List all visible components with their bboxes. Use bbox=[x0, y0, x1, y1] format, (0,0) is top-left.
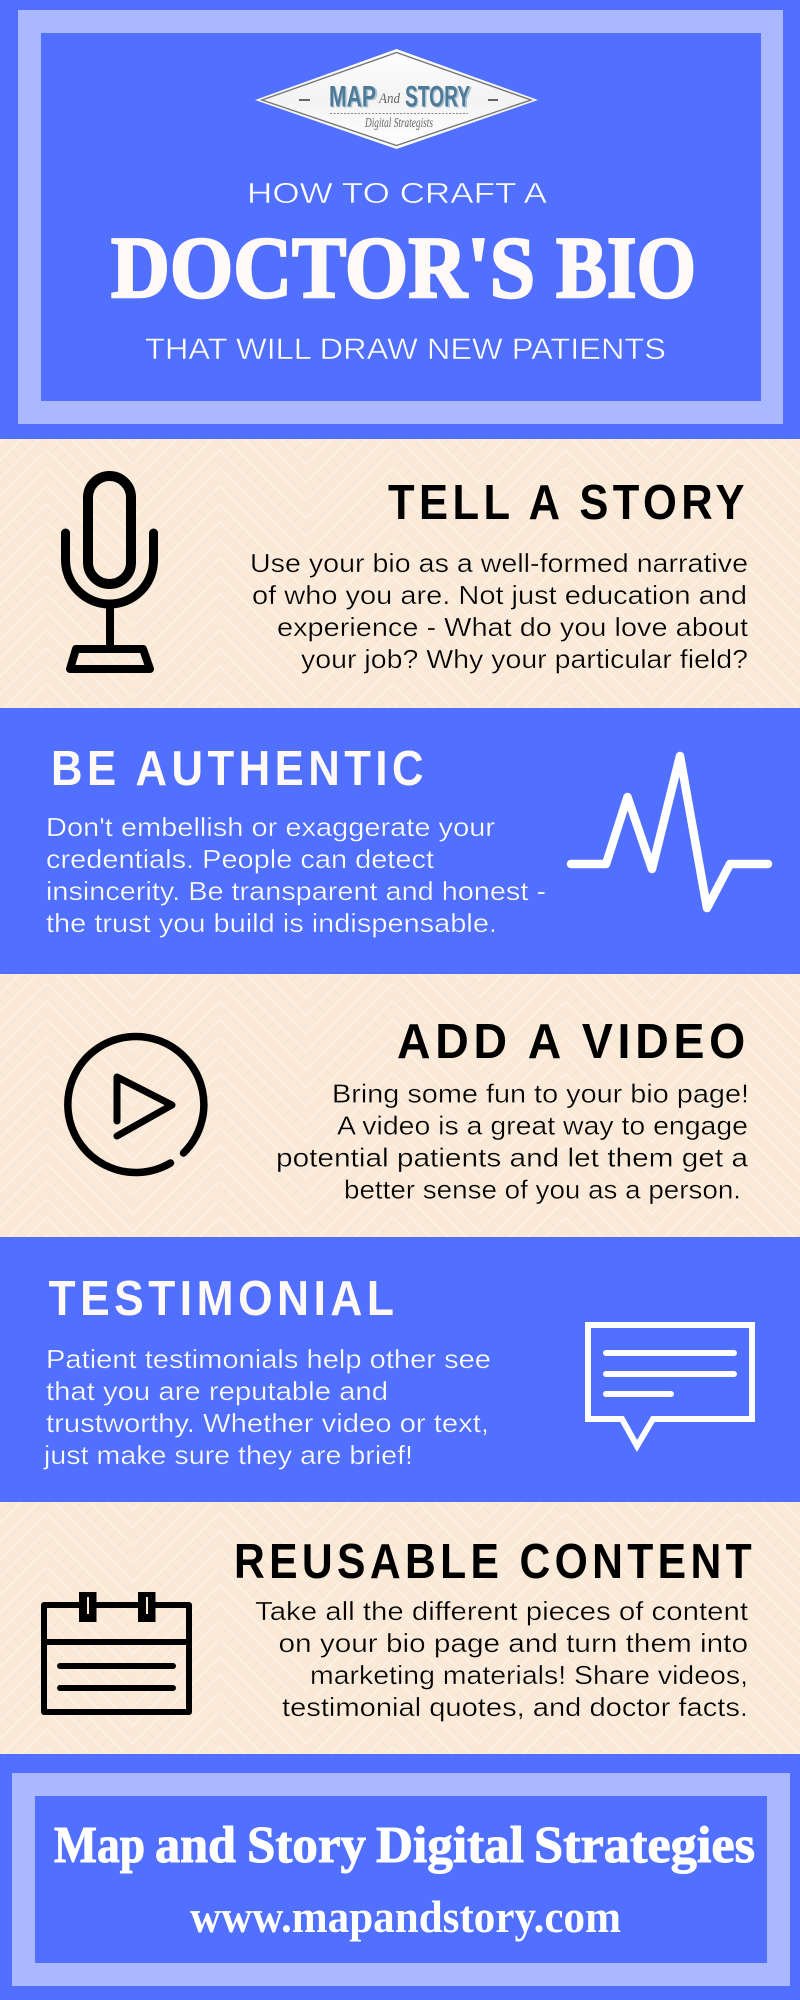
body text: be authentic: the trust you build is indispensable. bbox=[46, 908, 497, 938]
body text: add a video: A video is a great way to engage bbox=[337, 1110, 748, 1140]
footer company name: and bbox=[155, 1817, 236, 1874]
body text: reusable content: on your bio page and turn them into bbox=[278, 1628, 748, 1658]
body text: be authentic: credentials. People can detect bbox=[46, 844, 435, 874]
header frame bbox=[18, 10, 783, 424]
logo: Map and Story diamond badge: Digital Strategists bbox=[364, 116, 433, 131]
body text: add a video: potential patients and let them get a bbox=[276, 1142, 749, 1172]
body text: reusable content: Take all the different pieces of content bbox=[255, 1596, 749, 1626]
body text: add a video: better sense of you as a person. bbox=[344, 1174, 741, 1204]
body text: add a video: Bring some fun to your bio page! bbox=[332, 1078, 749, 1108]
body text: reusable content: testimonial quotes, and doctor facts. bbox=[282, 1692, 748, 1722]
body text: reusable content: marketing materials! Share videos, bbox=[310, 1660, 748, 1690]
body text: testimonial: trustworthy. Whether video or text, bbox=[46, 1408, 489, 1438]
footer company name: Digital bbox=[376, 1817, 524, 1874]
icon: heartbeat line bbox=[571, 756, 768, 908]
icon: play button bbox=[68, 1036, 204, 1172]
icon: calendar bbox=[44, 1592, 189, 1712]
logo: Map and Story diamond badge: And bbox=[378, 91, 400, 107]
icon: speech bubble bbox=[588, 1325, 752, 1446]
body text: tell a story: Use your bio as a well-formed narrative bbox=[250, 548, 748, 578]
logo: Map and Story diamond badge: MAP bbox=[329, 80, 376, 114]
heading: add a video: ADD A VIDEO bbox=[397, 1015, 750, 1069]
footer company name: Map bbox=[54, 1817, 145, 1874]
main title: DOCTOR'S bbox=[111, 220, 535, 317]
body text: tell a story: your job? Why your particular field? bbox=[301, 644, 748, 674]
body text: be authentic: insincerity. Be transparent and honest - bbox=[46, 876, 546, 906]
body text: testimonial bbox=[43, 1344, 491, 1470]
footer company name: Strategies bbox=[534, 1817, 755, 1874]
panel: reusable content bbox=[0, 1502, 800, 1754]
kicker: how to craft a: HOW TO CRAFT A bbox=[247, 178, 548, 210]
footer panel bbox=[12, 1773, 790, 1986]
footer frame bbox=[12, 1773, 790, 1986]
subtitle: THAT WILL DRAW NEW PATIENTS bbox=[145, 333, 666, 366]
body text: tell a story bbox=[250, 548, 749, 674]
panel: testimonial bbox=[43, 1272, 752, 1470]
body text: tell a story: of who you are. Not just education and bbox=[252, 580, 747, 610]
panel: add a video bbox=[0, 974, 800, 1237]
panel: be authentic bbox=[46, 742, 768, 938]
body text: reusable content bbox=[255, 1596, 749, 1722]
header panel bbox=[18, 10, 783, 424]
heading: be authentic: BE AUTHENTIC bbox=[51, 742, 428, 796]
footer company name bbox=[54, 1817, 755, 1874]
body text: tell a story: experience - What do you love about bbox=[277, 612, 749, 642]
main title: BIO bbox=[556, 220, 696, 317]
body text: testimonial: that you are reputable and bbox=[46, 1376, 388, 1406]
footer company name: Story bbox=[247, 1817, 366, 1874]
logo: Map and Story diamond badge bbox=[255, 49, 538, 149]
panel: tell a story bbox=[0, 439, 800, 708]
logo: Map and Story diamond badge: MAP bbox=[330, 82, 378, 114]
logo: Map and Story diamond badge: STORY bbox=[405, 80, 470, 114]
footer website: www.mapandstory.com bbox=[190, 1891, 621, 1942]
icon: microphone bbox=[66, 476, 154, 669]
body text: testimonial: just make sure they are brief! bbox=[43, 1440, 413, 1470]
heading: testimonial: TESTIMONIAL bbox=[48, 1272, 398, 1326]
body text: be authentic bbox=[46, 812, 546, 938]
logo: Map and Story diamond badge: STORY bbox=[406, 82, 472, 114]
heading: tell a story: TELL A STORY bbox=[388, 476, 749, 530]
body text: be authentic: Don't embellish or exaggerate your bbox=[46, 812, 495, 842]
body text: add a video bbox=[276, 1078, 749, 1204]
body text: testimonial: Patient testimonials help other see bbox=[46, 1344, 491, 1374]
